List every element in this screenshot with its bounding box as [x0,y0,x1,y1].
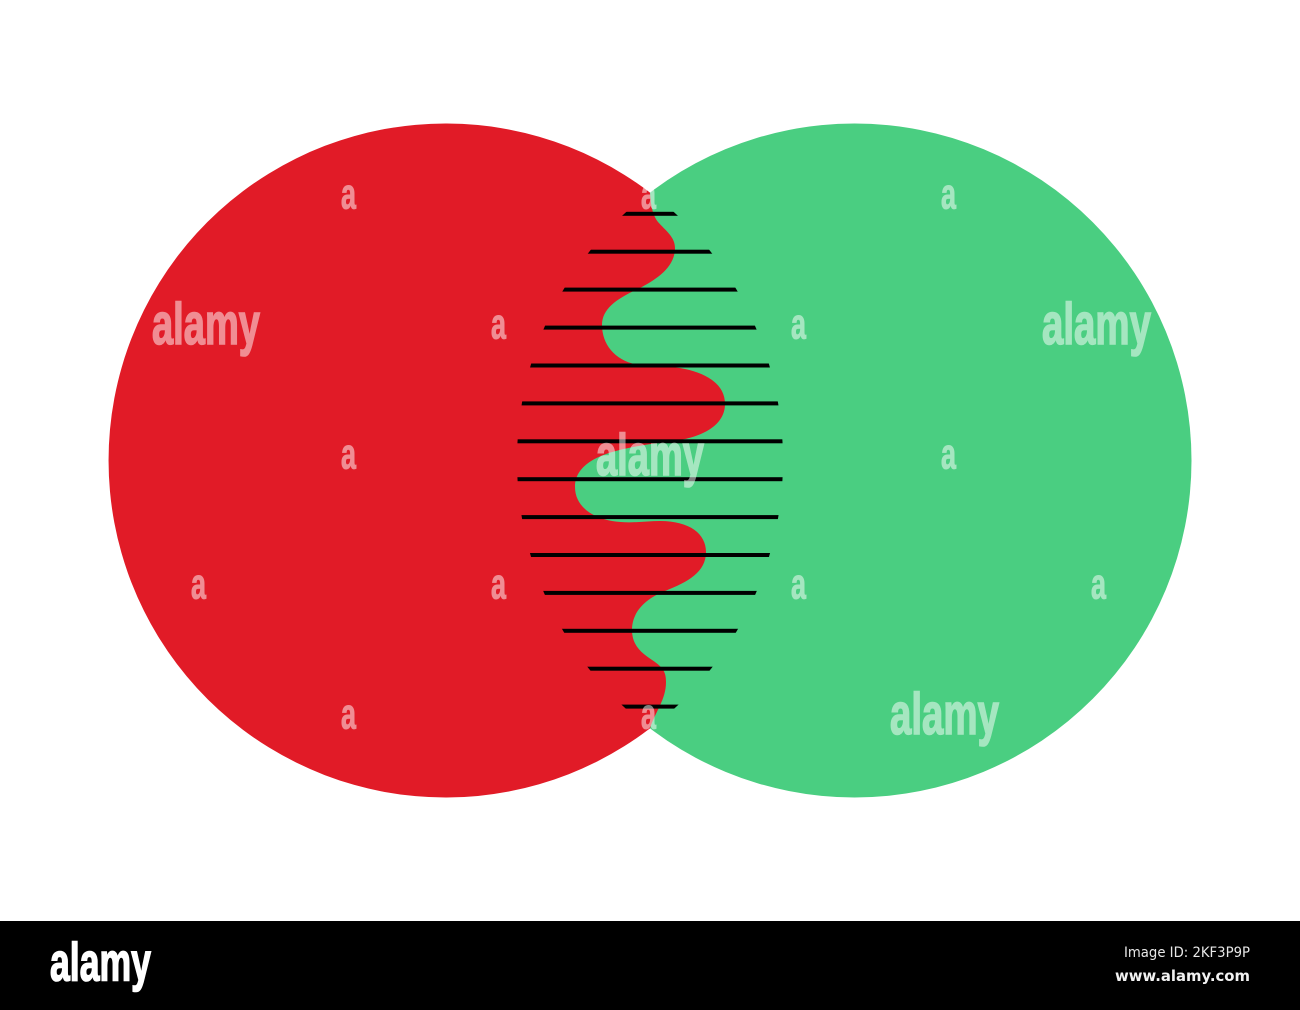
watermark: small letters: a [341,430,357,478]
watermark: small letters: a [491,560,507,608]
watermark: small letters: a [941,430,957,478]
green circle [518,124,1192,798]
watermark: small letters: a [641,170,657,218]
watermark: small letters: a [191,560,207,608]
watermark: small letters: a [791,300,807,348]
watermark: small letters: a [941,170,957,218]
footer bar [0,921,1300,1010]
watermark: large words: alamy [152,292,260,357]
watermark: small letters: a [791,560,807,608]
footer logo: alamy [50,932,151,992]
watermark: large words: alamy [596,423,704,488]
horizontal black lines in the overlap [517,212,783,709]
watermark: large words: alamy [890,682,999,747]
watermark: small letters [191,170,1107,738]
watermark: small letters: a [491,300,507,348]
website address: www.alamy.com [1115,967,1250,985]
watermark: large words [152,292,1151,747]
watermark: small letters: a [341,690,357,738]
red circle with wavy right boundary [109,123,725,797]
watermark: small letters: a [641,690,657,738]
watermark: small letters: a [341,170,357,218]
watermark: large words: alamy [1042,292,1151,357]
watermark: small letters: a [1091,560,1107,608]
image id text: Image ID: 2KF3P9P [1124,945,1250,961]
